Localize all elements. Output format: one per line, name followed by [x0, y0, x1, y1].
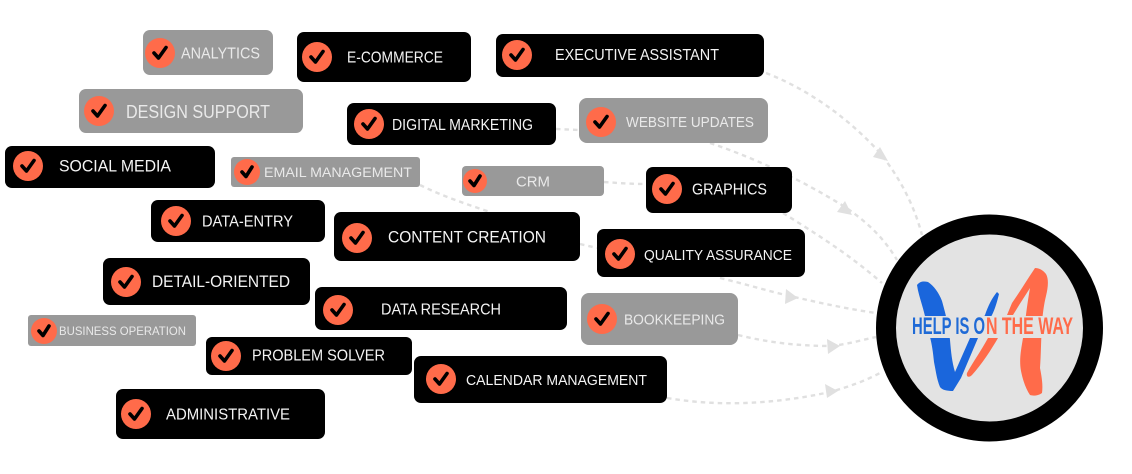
badge: business operation: BUSINESS OPERATION [59, 326, 186, 338]
badge: crm [462, 166, 604, 196]
badge: problem solver [206, 337, 412, 375]
badge: executive assistant: EXECUTIVE ASSISTANT [555, 47, 719, 64]
badge: data research: DATA RESEARCH [381, 302, 501, 318]
badge: content creation [334, 212, 580, 261]
badge: data-entry: DATA-ENTRY [202, 214, 293, 230]
badge: e-commerce: E-COMMERCE [347, 50, 443, 66]
badge: bookkeeping [581, 293, 738, 345]
badge: design support [79, 89, 303, 133]
logo: help is on the way [886, 224, 1093, 432]
badge: social media [5, 146, 215, 188]
dashed connectors [420, 73, 922, 403]
badge: graphics [646, 167, 792, 213]
badge: quality assurance: QUALITY ASSURANCE [644, 248, 792, 264]
badge: data research [315, 287, 567, 330]
badge: digital marketing [347, 103, 556, 145]
badge: website updates [579, 98, 768, 143]
badge: business operation [28, 315, 196, 346]
badge: website updates: WEBSITE UPDATES [626, 115, 754, 131]
badge: problem solver: PROBLEM SOLVER [252, 348, 385, 364]
badge: content creation: CONTENT CREATION [388, 228, 546, 246]
badge: data-entry [151, 200, 325, 242]
badge: design support: DESIGN SUPPORT [126, 102, 270, 122]
badge: quality assurance [597, 229, 805, 277]
badge: e-commerce [297, 32, 471, 82]
badge: analytics [143, 30, 273, 75]
badge: graphics: GRAPHICS [692, 182, 767, 198]
badge: analytics: ANALYTICS [181, 46, 260, 62]
badge: administrative: ADMINISTRATIVE [166, 406, 290, 424]
badge: calendar management [414, 356, 667, 403]
logo: help is on the way: HELP IS O [912, 313, 985, 340]
badge: crm: CRM [516, 174, 550, 190]
badge: email management: EMAIL MANAGEMENT [264, 164, 412, 180]
badge: administrative [116, 389, 325, 439]
badge: executive assistant [496, 34, 764, 77]
badge: detail-oriented: DETAIL-ORIENTED [152, 273, 290, 291]
badge: detail-oriented [103, 258, 310, 305]
badge: calendar management: CALENDAR MANAGEMENT [466, 372, 647, 389]
logo: help is on the way: N THE WAY [986, 313, 1073, 340]
badge: bookkeeping: BOOKKEEPING [624, 312, 725, 328]
badge: email management [231, 157, 420, 187]
badge: digital marketing: DIGITAL MARKETING [392, 117, 533, 134]
badge: social media: SOCIAL MEDIA [59, 156, 172, 176]
